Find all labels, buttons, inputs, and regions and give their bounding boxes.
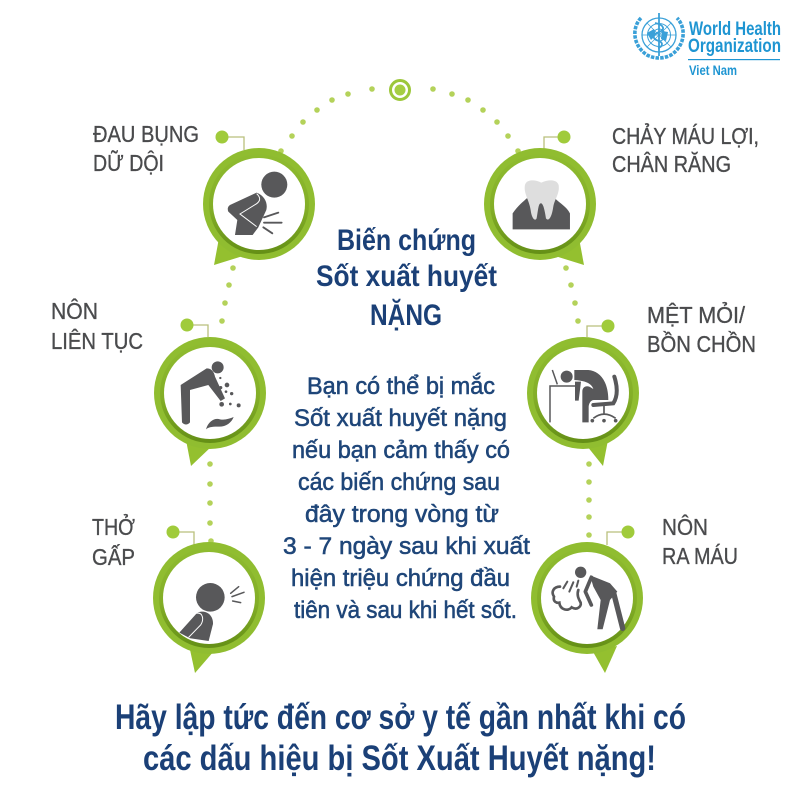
- body text: Bạn có thể bị mắc: [307, 373, 495, 400]
- title: [316, 224, 497, 332]
- call to action: [115, 698, 686, 778]
- logo: World Health Organization Viet Nam: Viet Nam: [689, 63, 737, 78]
- body text: tiên và sau khi hết sốt.: [294, 597, 517, 624]
- speech bubble: [203, 148, 315, 265]
- icon: person breathing fast: [179, 583, 244, 641]
- connector: [166, 526, 194, 545]
- label: [92, 512, 135, 570]
- title: Sốt xuất huyết: [316, 260, 497, 293]
- connector: [180, 318, 208, 337]
- label: MỆT MỎI/: [647, 300, 746, 328]
- body text: đây trong vòng từ: [305, 501, 499, 528]
- connector: [216, 130, 244, 150]
- icon: person vomiting: [181, 361, 241, 429]
- body text: các biến chứng sau: [298, 469, 500, 496]
- label: RA MÁU: [662, 543, 738, 569]
- body text: 3 - 7 ngày sau khi xuất: [283, 533, 530, 560]
- icon: person holding stomach: [228, 172, 287, 235]
- symptom: bleeding gums: [484, 121, 759, 265]
- symptom: persistent vomiting: [51, 297, 266, 466]
- icon: exhausted person at desk: [550, 370, 617, 422]
- label: [662, 513, 738, 569]
- body text: nếu bạn cảm thấy có: [292, 437, 510, 464]
- body text: Sốt xuất huyết nặng: [294, 405, 507, 432]
- icon: person vomiting blood: [553, 567, 623, 629]
- label: GẤP: [92, 543, 135, 570]
- label: [93, 121, 199, 176]
- label: BỒN CHỒN: [647, 330, 756, 357]
- icon: WHO emblem: [635, 13, 683, 58]
- label: THỞ: [92, 512, 135, 540]
- label: LIÊN TỤC: [51, 328, 143, 354]
- connector: [544, 130, 570, 150]
- title: Biến chứng: [337, 224, 476, 257]
- call to action: các dấu hiệu bị Sốt Xuất Huyết nặng!: [143, 739, 656, 778]
- speech bubble: [531, 542, 643, 673]
- speech bubble: [154, 337, 266, 466]
- speech bubble: [153, 542, 265, 673]
- label: [612, 121, 759, 177]
- label: DỮ DỘI: [93, 149, 164, 176]
- title: NẶNG: [370, 298, 442, 332]
- speech bubble: [484, 148, 596, 265]
- icon: tooth and gums: [513, 180, 570, 229]
- dotted arc connecting the symptoms: [207, 86, 592, 544]
- label: NÔN: [662, 513, 708, 540]
- body text: hiện triệu chứng đầu: [291, 565, 510, 592]
- symptom: restlessness: [527, 300, 756, 466]
- connector: [607, 526, 634, 545]
- label: CHÂN RĂNG: [612, 151, 731, 177]
- symptom: vomiting blood: [531, 513, 738, 673]
- logo: World Health Organization Viet Nam: [635, 13, 781, 78]
- symptom: rapid breathing: [92, 512, 265, 673]
- label: [51, 297, 143, 354]
- body text: [283, 373, 530, 624]
- icon: top ring marker: [390, 80, 410, 100]
- symptom: severe abdominal pain: [93, 121, 315, 265]
- label: CHẢY MÁU LỢI,: [612, 121, 759, 149]
- label: [647, 300, 756, 357]
- speech bubble: [527, 337, 639, 466]
- label: ĐAU BỤNG: [93, 121, 199, 147]
- connector: [587, 320, 614, 337]
- label: NÔN: [51, 297, 98, 324]
